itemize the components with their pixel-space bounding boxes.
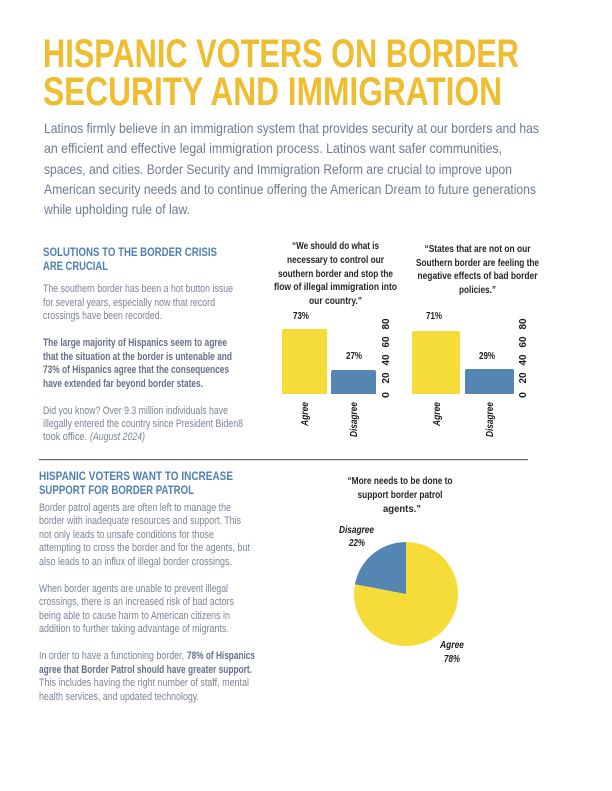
- category labels: [431, 402, 496, 437]
- text block: border crisis: illegally entered the country since President Biden8: [43, 418, 243, 430]
- text block: border patrol: [39, 502, 255, 703]
- text block: border patrol: being able to cause harm to American citizens in: [39, 610, 230, 622]
- quote: more needs to be done: “More needs to be done to: [348, 475, 452, 487]
- quote: states not on the border: negative effects of bad border: [418, 270, 538, 282]
- text block: border patrol: Border patrol agents are often left to manage the: [39, 502, 231, 514]
- quote: control our southern border: “We should do what is: [292, 240, 379, 252]
- text block: border patrol: also leads to an influx of illegal border crossings.: [39, 556, 232, 568]
- text block: border patrol: 78% of Hispanics: [187, 650, 255, 662]
- text block: border crisis: [43, 283, 243, 443]
- bar: disagree 27%: 27%: [346, 350, 363, 362]
- title: SECURITY AND IMMIGRATION: [43, 70, 502, 114]
- label: agree 78%: [439, 639, 464, 665]
- text block: border crisis: 73% of Hispanics agree that the consequences: [43, 364, 229, 376]
- text block: border crisis: Did you know? Over 9.3 million individuals have: [43, 405, 228, 417]
- text block: border crisis: have extended far beyond border states.: [43, 378, 203, 390]
- label: disagree 22%: Disagree: [339, 524, 374, 536]
- label: agree 78%: Agree: [439, 639, 464, 651]
- text block: border patrol: not only leads to unsafe conditions for those: [39, 529, 214, 541]
- label: disagree 22%: [339, 524, 374, 549]
- text block: border patrol: crossings, there is an increased risk of bad actors: [39, 596, 234, 608]
- bar: agree 71%: [412, 310, 460, 394]
- quote: control our southern border: [274, 240, 397, 307]
- intro paragraph: [43, 120, 539, 217]
- text block: border patrol: addition to further taking advantage of migrants.: [39, 623, 229, 635]
- text block: border patrol: attempting to cross the border and for the agents, but: [39, 542, 250, 554]
- category labels: Disagree: [348, 402, 360, 437]
- text block: border patrol: In order to have a functioning border,: [39, 650, 184, 662]
- intro paragraph: an efficient and effective legal immigration process. Latinos want safer communities,: [44, 140, 502, 156]
- title: [43, 32, 519, 114]
- quote: states not on the border: policies.”: [459, 284, 496, 296]
- quote: more needs to be done: support border patrol: [358, 489, 443, 501]
- label: agree 78%: 78%: [444, 653, 461, 665]
- text block: border crisis: The large majority of Hispanics seem to agree: [43, 337, 227, 349]
- text block: border patrol: When border agents are unable to prevent illegal: [39, 583, 228, 595]
- bar chart: states feeling effects: [412, 243, 539, 437]
- axis values: 80: [517, 318, 529, 330]
- quote: control our southern border: southern border and stop the: [278, 268, 393, 280]
- bar: agree 73%: 73%: [293, 310, 310, 322]
- quote: control our southern border: necessary to control our: [287, 254, 384, 266]
- axis values: 60: [517, 336, 529, 348]
- quote: states not on the border: Southern border are feeling the: [416, 257, 539, 269]
- axis values: [380, 318, 392, 398]
- text block: border crisis: crossings have been recorded.: [43, 310, 162, 322]
- heading: support for border patrol: [39, 471, 233, 497]
- pie slice: disagree 22%: [355, 542, 406, 594]
- pie chart: border patrol support: [339, 475, 464, 665]
- text block: border patrol: This includes having the right number of staff, mental: [39, 677, 249, 689]
- category labels: Agree: [431, 402, 443, 427]
- axis values: 20: [517, 372, 529, 384]
- axis values: 80: [380, 318, 392, 330]
- intro paragraph: while upholding rule of law.: [43, 201, 190, 217]
- heading: support for border patrol: HISPANIC VOTERS WANT TO INCREASE: [39, 471, 233, 483]
- heading: support for border patrol: SUPPORT FOR BORDER PATROL: [39, 485, 194, 497]
- bar: disagree 29%: [465, 350, 514, 394]
- bar: disagree 29%: 29%: [479, 350, 496, 362]
- intro paragraph: American security needs and to continue offering the American Dream to future generations: [44, 181, 536, 197]
- text block: border crisis: (August 2024): [90, 431, 145, 443]
- category labels: Disagree: [484, 402, 496, 437]
- quote: states not on the border: [416, 243, 539, 296]
- text block: border crisis: that the situation at the border is untenable and: [43, 351, 232, 363]
- quote: more needs to be done: agents.”: [383, 503, 421, 515]
- bar chart: control southern border: [274, 240, 397, 437]
- text block: border patrol: agree that Border Patrol should have greater support.: [39, 664, 252, 676]
- quote: more needs to be done: [348, 475, 452, 515]
- label: disagree 22%: 22%: [348, 537, 366, 549]
- heading: solutions to the border crisis: [43, 247, 217, 273]
- bar: agree 73%: [282, 310, 327, 394]
- intro paragraph: spaces, and cities. Border Security and Immigration Reform are crucial to improve upon: [44, 161, 512, 177]
- axis values: 60: [380, 336, 392, 348]
- heading: solutions to the border crisis: ARE CRUCIAL: [43, 261, 108, 273]
- category labels: [299, 402, 360, 437]
- axis values: 0: [380, 392, 392, 398]
- bar: disagree 27%: [331, 350, 376, 394]
- text block: border crisis: for several years, especially now that record: [43, 297, 215, 309]
- quote: states not on the border: “States that are not on our: [424, 243, 530, 255]
- text block: border patrol: border with inadequate resources and support. This: [39, 515, 241, 527]
- intro paragraph: Latinos firmly believe in an immigration system that provides security at our borders and has: [44, 120, 539, 136]
- pie slice: agree 78%: [354, 542, 458, 646]
- axis values: 0: [517, 392, 529, 398]
- axis values: 40: [380, 354, 392, 366]
- text block: border crisis: took office.: [43, 431, 87, 443]
- text block: border patrol: health services, and updated technology.: [39, 691, 199, 703]
- axis values: 20: [380, 372, 392, 384]
- category labels: Agree: [299, 402, 311, 427]
- bar: agree 71%: 71%: [426, 310, 443, 322]
- quote: control our southern border: flow of illegal immigration into: [274, 281, 397, 293]
- text block: border crisis: The southern border has been a hot button issue: [43, 283, 233, 295]
- heading: solutions to the border crisis: SOLUTIONS TO THE BORDER CRISIS: [43, 247, 217, 259]
- axis values: [517, 318, 529, 398]
- quote: control our southern border: our country.”: [309, 295, 362, 307]
- axis values: 40: [517, 354, 529, 366]
